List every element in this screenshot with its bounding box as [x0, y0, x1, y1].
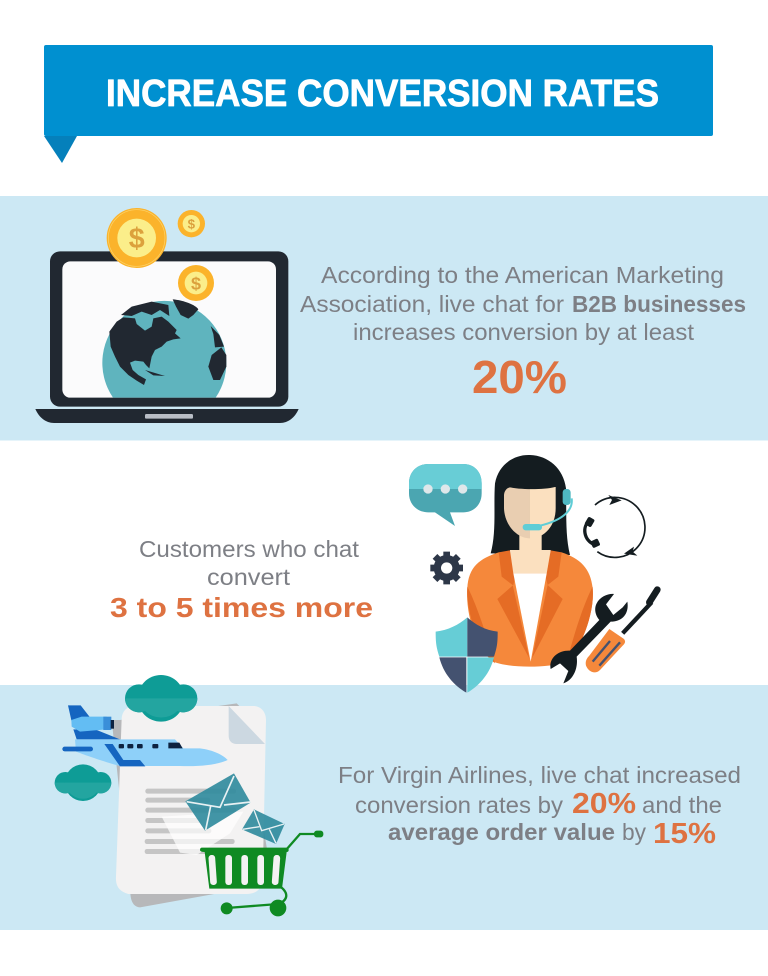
icon: large envelope [185, 773, 251, 831]
icon: gear [430, 552, 463, 584]
icon: phone cycle [584, 495, 645, 557]
icon: wrench [550, 594, 628, 683]
icon: airplane [62, 705, 228, 766]
icon: screwdriver [586, 590, 657, 672]
illustration: support agent [409, 455, 657, 693]
text: Virgin Airlines statement [338, 762, 741, 850]
document shadow [112, 703, 273, 907]
text: Virgin Airlines statement: average order value [388, 819, 615, 845]
text: Virgin Airlines statement: conversion rates by [355, 792, 563, 818]
icon: small cloud [55, 764, 111, 801]
document text lines [145, 789, 236, 854]
text: customers who chat convert: convert [207, 564, 290, 590]
document [116, 706, 266, 894]
icon: shield [436, 617, 498, 693]
stat: 20%: 20% [472, 351, 567, 403]
icon: headset [523, 489, 572, 530]
globe [102, 299, 226, 398]
text: customers who chat convert [139, 536, 359, 590]
title: INCREASE CONVERSION RATES [106, 73, 659, 115]
icon: small coin [178, 210, 205, 237]
icon: small coin: $ [188, 216, 196, 231]
agent hair [491, 455, 570, 555]
text: American Marketing Association statement: According to the American Marketing [321, 262, 724, 288]
icon: white glow panel [162, 812, 243, 855]
stat: 3 to 5 times more: 3 to 5 times more [110, 592, 373, 623]
laptop [35, 251, 299, 423]
title banner [44, 45, 713, 163]
panel: Virgin Airlines [0, 675, 768, 930]
text: American Marketing Association statement [300, 262, 746, 345]
text: American Marketing Association statement: B2B businesses [572, 291, 746, 317]
icon: medium coin [178, 265, 214, 301]
icon: large coin [107, 208, 167, 268]
text: American Marketing Association statement: increases conversion by at least [353, 319, 694, 345]
icon: large cloud [125, 675, 197, 722]
text: customers who chat convert: Customers who chat [139, 536, 359, 562]
text: Virgin Airlines statement: by [622, 819, 646, 845]
stat: 20%: 20% [572, 788, 636, 820]
icon: shopping cart [200, 831, 323, 916]
text: Virgin Airlines statement: For Virgin Airlines, live chat increased [338, 762, 741, 788]
document fold [229, 706, 265, 744]
illustration: document with plane, envelopes and cart [55, 675, 323, 916]
icon: large coin: $ [129, 223, 145, 255]
icon: speech bubble [409, 464, 482, 526]
icon: laptop with globe and coins [35, 208, 299, 423]
panel: customers who chat [110, 455, 657, 693]
icon: small envelope [242, 809, 285, 844]
text: Virgin Airlines statement: and the [642, 792, 722, 818]
text: American Marketing Association statement: Association, live chat for [300, 291, 564, 317]
icon: medium coin: $ [191, 273, 201, 293]
stat: 15%: 15% [653, 818, 716, 850]
panel: B2B conversion [0, 196, 768, 440]
agent jacket [467, 550, 593, 667]
agent face and neck [504, 475, 556, 573]
